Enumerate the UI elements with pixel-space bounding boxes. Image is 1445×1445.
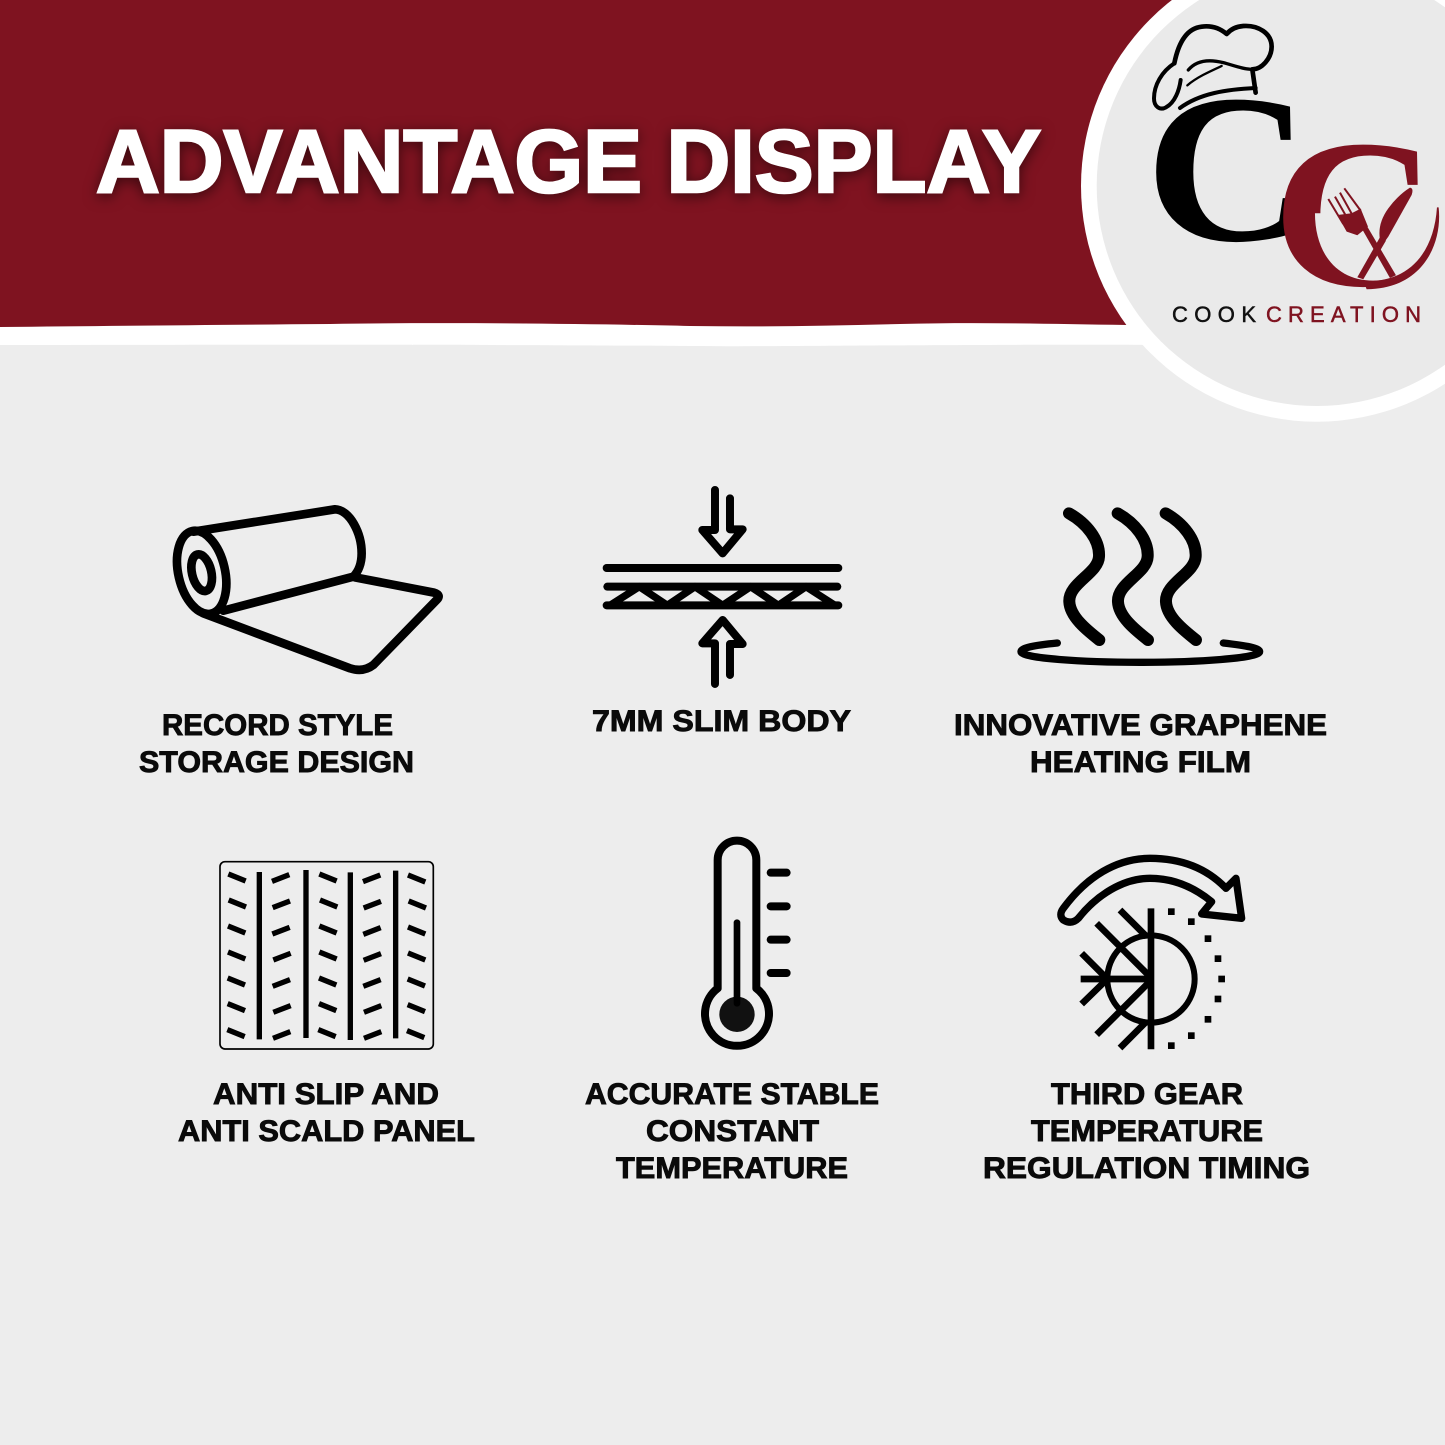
label: INNOVATIVE GRAPHENE (954, 709, 1327, 742)
label: RECORD STYLE (162, 709, 393, 742)
logo: fork, knife and C tail (1315, 188, 1445, 295)
label: THIRD GEAR (1051, 1078, 1243, 1111)
label (139, 709, 414, 779)
icon: compressed layers (607, 490, 838, 684)
icon: heat and cool dial with arrow (1061, 858, 1242, 1049)
label: STORAGE DESIGN (139, 746, 414, 779)
logo: chef hat (1154, 26, 1272, 108)
logo: black C: C (1145, 51, 1310, 286)
feature: anti slip and anti scald panel (178, 862, 475, 1148)
label (954, 709, 1327, 779)
label: REGULATION TIMING (983, 1152, 1310, 1185)
logo badge (1081, 0, 1445, 422)
label (178, 1078, 475, 1148)
label: ACCURATE STABLE (585, 1078, 879, 1111)
feature: record style storage design (139, 509, 439, 779)
label: 7MM SLIM BODY (592, 705, 851, 738)
label: ANTI SCALD PANEL (178, 1115, 475, 1148)
feature: accurate stable constant temperature (585, 841, 879, 1185)
feature: 7mm slim body (592, 490, 851, 738)
label: CONSTANT (646, 1115, 819, 1148)
icon: roll (169, 509, 439, 670)
icon: thermometer (705, 841, 787, 1046)
logo wordmark: CREATION (1266, 302, 1421, 327)
icon: heat waves (1021, 513, 1260, 662)
logo: red C: C (1272, 96, 1437, 331)
icon: textured panel (220, 862, 433, 1049)
label (585, 1078, 879, 1185)
feature: third gear temperature regulation timing (983, 858, 1310, 1185)
label: HEATING FILM (1030, 746, 1251, 779)
feature: innovative graphene heating film (954, 513, 1327, 779)
label: TEMPERATURE (1031, 1115, 1263, 1148)
label: TEMPERATURE (616, 1152, 848, 1185)
header banner (0, 0, 1200, 327)
logo wordmark: COOK (1172, 302, 1256, 327)
logo wordmark (1172, 302, 1421, 327)
label: ANTI SLIP AND (213, 1078, 439, 1111)
title: ADVANTAGE DISPLAY (96, 111, 1041, 211)
label (983, 1078, 1310, 1185)
